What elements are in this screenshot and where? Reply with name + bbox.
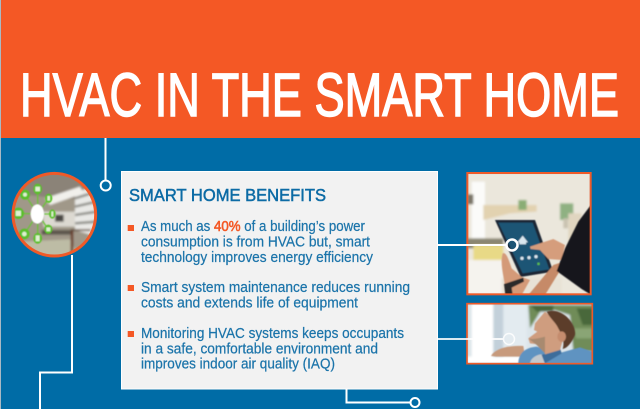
photo: man relaxing with clean air (467, 303, 593, 364)
watch (504, 278, 524, 295)
connector: panel to relaxing man photo (438, 334, 514, 344)
benefit 3 (128, 326, 404, 372)
panel: smart home benefits (122, 172, 438, 389)
man (491, 346, 525, 357)
benefit 1: technology improves energy efficiency (141, 250, 374, 266)
benefit 3: improves indoor air quality (IAQ) (141, 356, 335, 372)
connector: banner to node (101, 138, 111, 190)
sleeve (557, 204, 591, 295)
benefit 1: consumption is from HVAC but, smart (141, 234, 370, 250)
benefit 2 (128, 280, 410, 312)
connector: circular photo to lower left (40, 255, 72, 409)
benefit 1: As much as 40% of a building’s power (141, 219, 365, 235)
benefit 3: in a safe, comfortable environment and (141, 342, 378, 358)
circular photo: smart home interior (12, 172, 97, 258)
connector: panel to tablet photo (438, 240, 518, 250)
tablet (495, 220, 553, 277)
benefit 3: Monitoring HVAC systems keeps occupants (141, 326, 404, 342)
benefit 2: Smart system maintenance reduces running (141, 280, 410, 296)
photo: hands holding smart home tablet (467, 172, 591, 295)
benefit 1 (128, 219, 374, 266)
hand (502, 253, 530, 295)
panel heading: SMART HOME BENEFITS (129, 185, 326, 205)
left edge strip (0, 0, 1, 409)
benefit 2: costs and extends life of equipment (141, 296, 358, 312)
connector: panel bottom to node (346, 389, 420, 407)
